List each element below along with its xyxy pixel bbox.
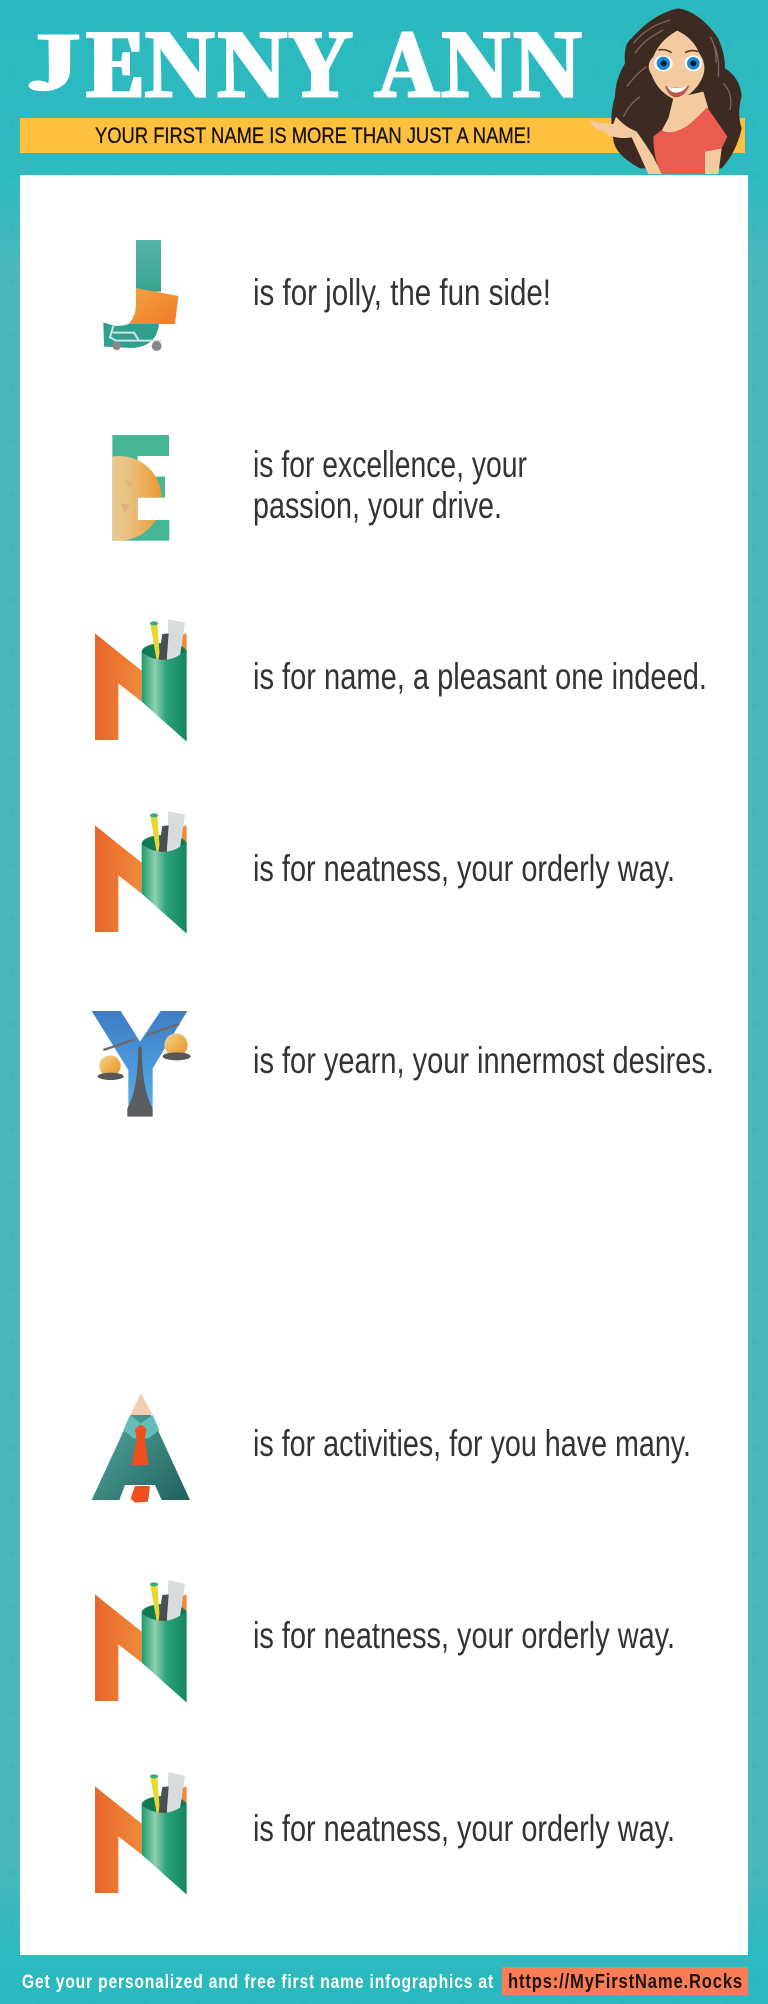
icon: letter J with shopping cart [103,240,178,351]
main white panel [20,175,748,955]
icon: letter A with necktie [92,1393,190,1503]
icon: letter E with moon [112,435,170,541]
title: ANN [374,0,583,121]
title [29,0,583,121]
item: letter N [95,1580,675,1703]
icon: letter N with pencil cup [95,1772,187,1895]
title: ENNY [84,0,352,121]
item: letter Y [92,1011,714,1117]
icon: letter N with pencil cup [95,1580,187,1703]
item: letter E: passion, your drive. [253,485,502,526]
icon: letter N with pencil cup [95,811,187,934]
banner text: YOUR FIRST NAME IS MORE THAN JUST A NAME! [95,123,531,148]
text: E: is for excellence, your [253,444,527,485]
icon: letter Y with balance scale [92,1011,191,1117]
item: letter A [92,1393,691,1503]
item: letter N [95,1772,675,1895]
text: J: is for jolly, the fun side! [253,272,551,313]
character illustration [590,8,742,174]
item: letter N [95,811,675,934]
footer text: Get your personalized and free first name infographics at [22,1972,494,1993]
item: letter J [103,240,551,351]
banner [20,118,745,153]
icon: letter N with pencil cup [95,619,187,742]
item: letter N [95,619,707,742]
item: letter E [77,435,527,541]
title: J [29,12,80,97]
